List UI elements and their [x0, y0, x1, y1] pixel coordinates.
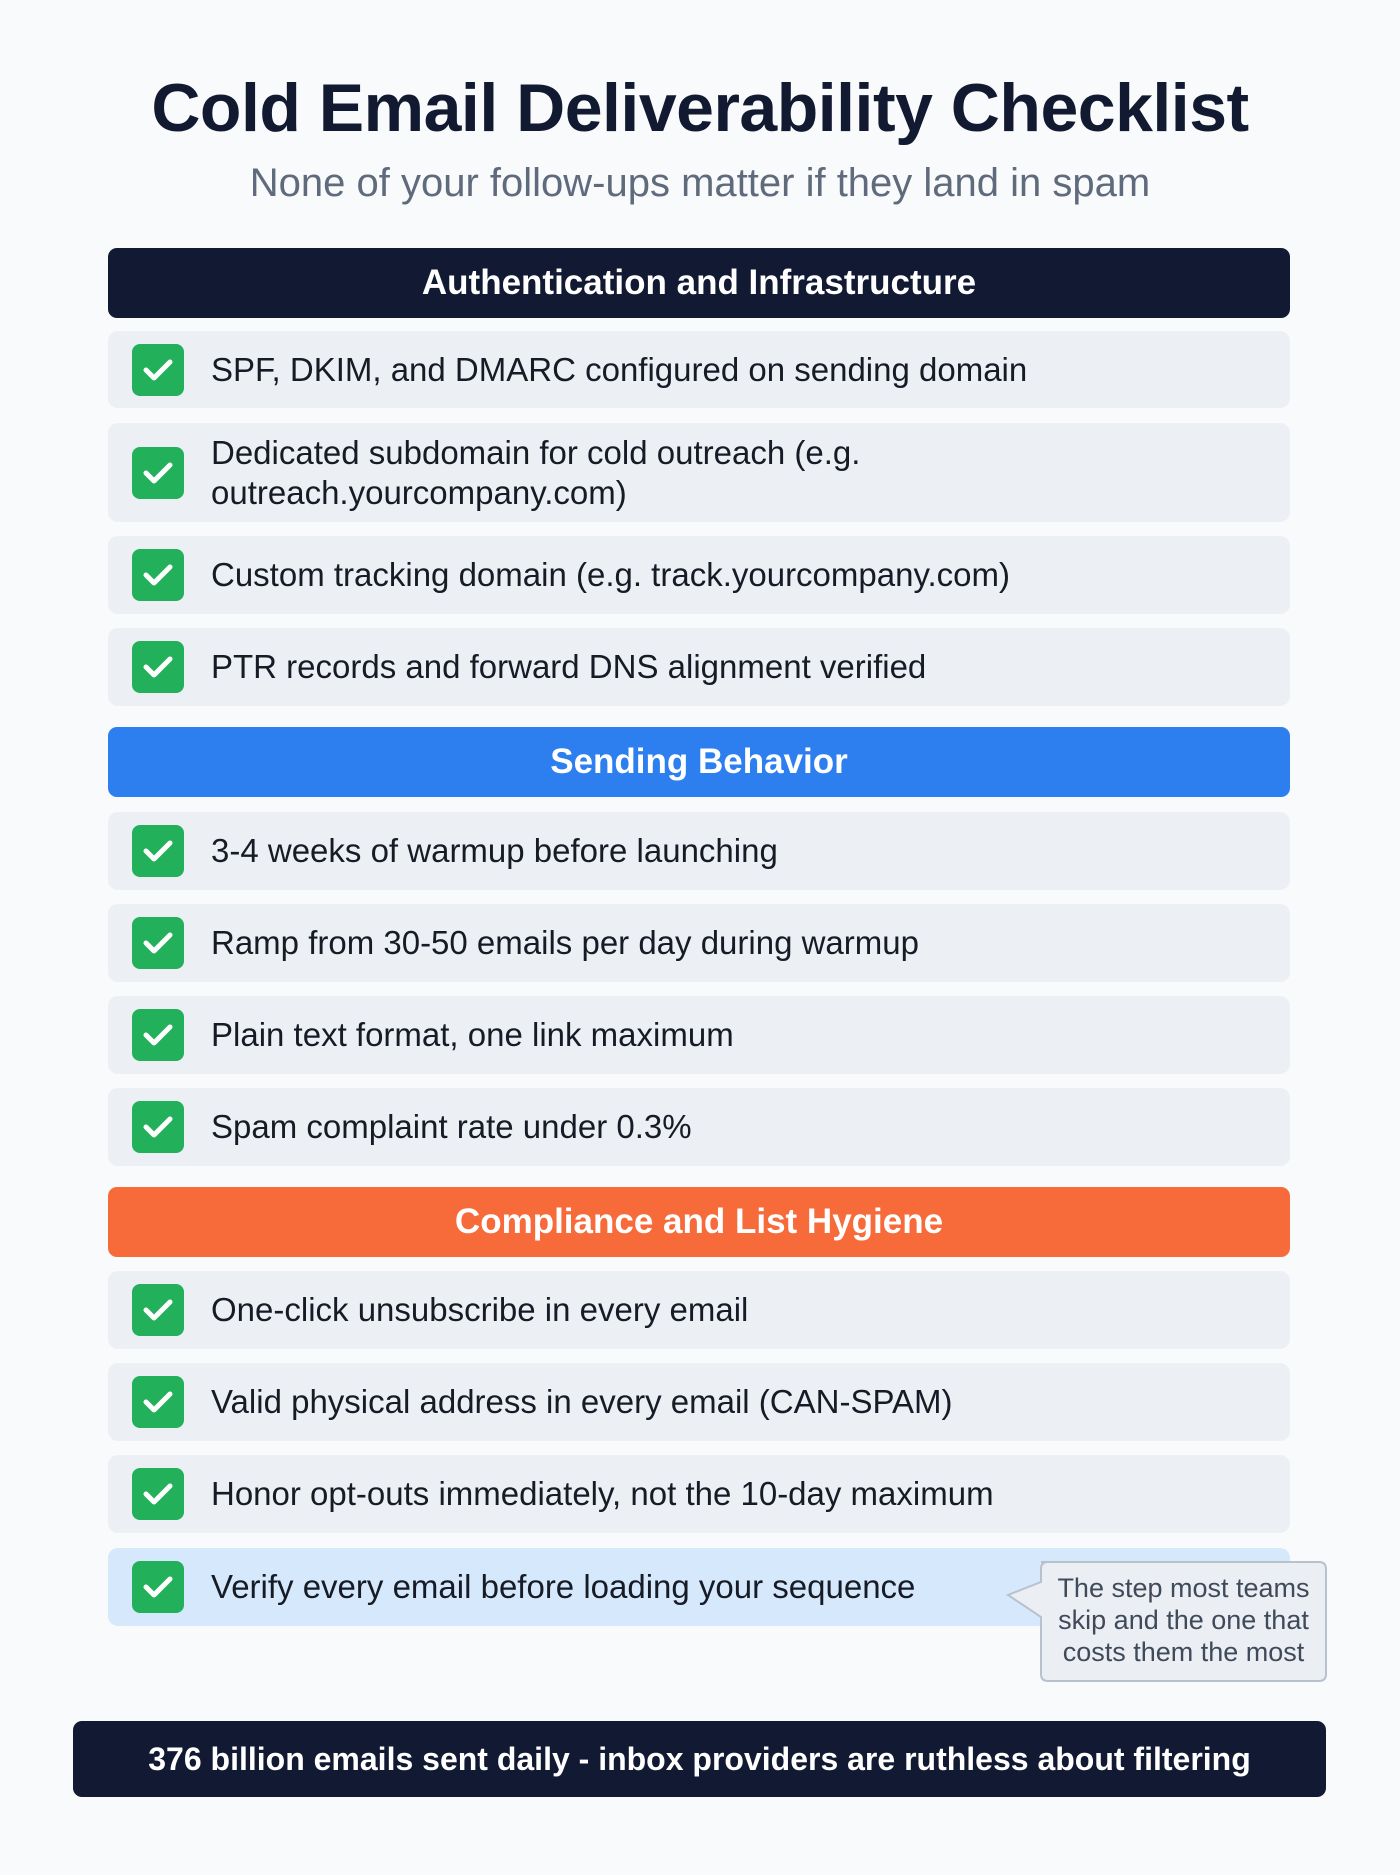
item: ptr: [108, 628, 1290, 706]
header: compliance: Compliance and List Hygiene: [455, 1202, 943, 1241]
item: warmup: 3-4 weeks of warmup before launching: [211, 832, 778, 869]
callout: [1006, 1561, 1327, 1682]
header: authentication: [108, 248, 1290, 318]
item: verify (highlighted): Verify every email before loading your sequence: [211, 1568, 915, 1605]
item: unsubscribe: One-click unsubscribe in every email: [211, 1291, 748, 1328]
header: sending behavior: [108, 727, 1290, 797]
item: ramp: Ramp from 30-50 emails per day during warmup: [211, 924, 919, 961]
item: verify (highlighted): [108, 1548, 1290, 1626]
item: spf: SPF, DKIM, and DMARC configured on sending domain: [211, 350, 1027, 388]
item: tracking: [108, 536, 1290, 614]
item: ptr: PTR records and forward DNS alignment verified: [211, 648, 926, 685]
footer banner: [73, 1721, 1326, 1797]
item: ramp: [108, 904, 1290, 982]
item: subdomain: [108, 423, 1290, 522]
item: spf: [108, 331, 1290, 408]
item: opt-outs: [108, 1455, 1290, 1533]
item: tracking: Custom tracking domain (e.g. track.yourcompany.com): [211, 556, 1010, 593]
item: warmup: [108, 812, 1290, 890]
item: spam rate: Spam complaint rate under 0.3%: [211, 1108, 692, 1145]
item: subdomain: outreach.yourcompany.com): [211, 474, 627, 510]
subtitle: None of your follow-ups matter if they land in spam: [250, 161, 1150, 205]
header: sending behavior: Sending Behavior: [550, 742, 848, 781]
item: address: [108, 1363, 1290, 1441]
item: plain text: Plain text format, one link maximum: [211, 1016, 734, 1053]
item: spam rate: [108, 1088, 1290, 1166]
item: plain text: [108, 996, 1290, 1074]
item: opt-outs: Honor opt-outs immediately, not the 10-day maximum: [211, 1475, 994, 1512]
item: unsubscribe: [108, 1271, 1290, 1349]
footer banner: 376 billion emails sent daily - inbox providers are ruthless about filtering: [148, 1740, 1251, 1776]
header: compliance: [108, 1187, 1290, 1257]
title: Cold Email Deliverability Checklist: [151, 70, 1249, 146]
callout: The step most teams skip and the one that costs them the most: [1057, 1573, 1310, 1667]
item: address: Valid physical address in every email (CAN-SPAM): [211, 1383, 953, 1420]
header: authentication: Authentication and Infrastructure: [422, 263, 976, 302]
item: subdomain: Dedicated subdomain for cold outreach (e.g.: [211, 434, 860, 470]
